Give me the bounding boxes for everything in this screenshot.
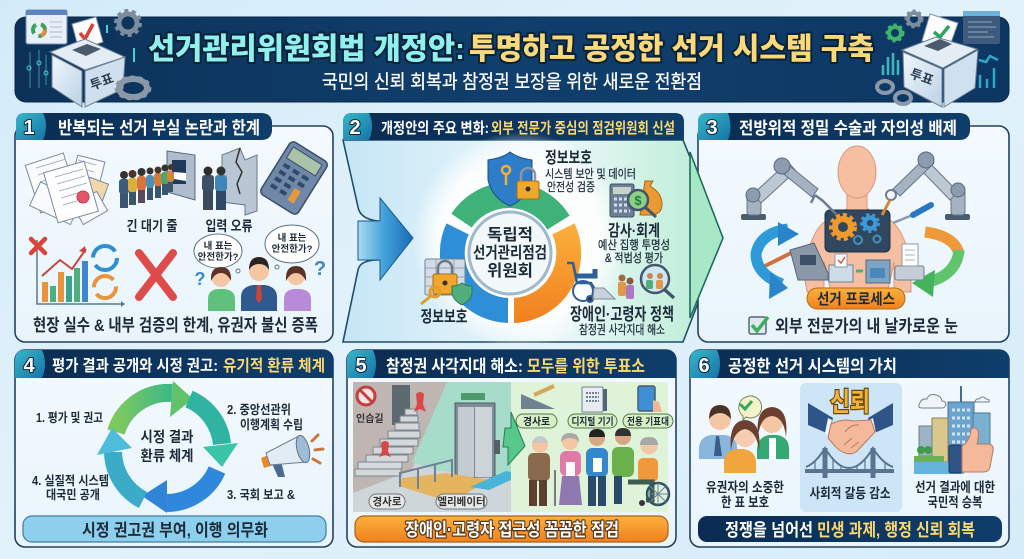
icon: handrail and ramp (399, 460, 511, 501)
panel 6: value of fair election system (690, 350, 1009, 547)
title: 투명하고 공정한 선거 시스템 구축 (469, 33, 874, 66)
panel 2 heading (343, 113, 684, 140)
label: stairs: 인습길 (356, 412, 384, 425)
panel 6 heading: 6 (698, 355, 710, 377)
label: disabled and senior policy: 참정권 사각지대 해소 (579, 323, 665, 337)
icon: suspension bridge (805, 448, 894, 478)
highlight bar: 시정 권고권 부여, 이행 의무화 (82, 521, 268, 540)
speech bubble right (265, 225, 319, 269)
icon: people under magnifier (618, 265, 674, 299)
panel 5 heading: 모두를 위한 투표소 (527, 357, 645, 376)
pill: dedicated booth: 전용 기표대 (627, 415, 669, 428)
cycle centre label (140, 429, 194, 465)
caption: 외부 전문가의 내 날카로운 눈 (775, 317, 958, 336)
icon: human torso (805, 146, 911, 292)
label: disabled and senior policy: 장애인·고령자 정책 (570, 305, 674, 324)
label: audit and accounting: & 적법성 평가 (605, 251, 663, 265)
arrow: blue left cycle (756, 222, 799, 299)
ring centre label: 위원회 (487, 262, 533, 280)
highlight bar: 정쟁을 넘어선 (725, 520, 813, 540)
label: step 4: 4. 실질적 시스템 (32, 474, 109, 488)
group of voters (528, 428, 669, 506)
chart: feedback cycle (97, 381, 238, 513)
panel 4 heading: 평가 결과 공개와 시정 권고: (52, 357, 218, 375)
label: elevator: 엘리베이터 (437, 495, 486, 508)
icon: check box (749, 317, 768, 334)
arrow: orange to green right cycle (912, 232, 959, 297)
label: audit and accounting: 예산 집행 투명성 (598, 237, 670, 252)
highlight bar (698, 516, 1002, 542)
panel 2 heading: 외부 전문가 중심의 점검위원회 신설 (491, 120, 675, 137)
icon: three voters and check (699, 396, 789, 473)
label: reduced social conflict: 사회적 갈등 감소 (810, 486, 890, 501)
trust word: 신뢰 (830, 387, 870, 417)
panel 5 heading (347, 350, 676, 378)
icon: left robot arm (741, 158, 836, 220)
green chevron tip of panel 2 (690, 152, 723, 318)
ring centre label: 선거관리점검 (473, 244, 547, 262)
marks: ribbons (379, 392, 426, 457)
icon: audit calculator and money: $ (634, 193, 642, 208)
icon: control panel with gears (825, 210, 890, 252)
panel 6 heading: 공정한 선거 시스템의 가치 (728, 357, 897, 376)
icon: digital device (582, 387, 607, 412)
icon: large red x (139, 253, 173, 297)
panel 4 heading: 유기적 환류 체계 (223, 357, 325, 375)
speech bubble right: 내 표는 (278, 232, 307, 244)
icon: left ballot box: 투표 (88, 71, 116, 93)
label: public acceptance (915, 480, 995, 510)
panel 5: eliminating voting blind spots (347, 350, 676, 547)
panel 3 heading: 전방위적 정밀 수술과 자의성 배제 (739, 119, 957, 138)
header banner (15, 10, 1009, 107)
speech bubble left: 내 표는 (204, 240, 233, 252)
pill: ramp: 경사로 (523, 415, 550, 428)
label: audit and accounting (598, 222, 670, 265)
arrow: cyan step (97, 428, 143, 500)
icon: long queue (119, 151, 195, 208)
icon: shield and lock (488, 152, 539, 206)
speech bubble right: 안전한가? (272, 243, 313, 255)
icon: elevator (455, 393, 500, 477)
icon: tablet (638, 386, 662, 412)
icon: megaphone (261, 434, 323, 477)
label: information protection top: 정보보호 (545, 149, 592, 167)
label: step 2: 이행계획 수립 (240, 417, 303, 432)
icon: right ballot box (877, 11, 1000, 107)
label: protecting each vote: 한 표 보호 (721, 495, 769, 510)
label: input error: 입력 오류 (206, 218, 253, 234)
speech bubble left: 안전한가? (198, 251, 239, 263)
label: information protection left: 정보보호 (420, 308, 468, 326)
arrow: blue step (142, 470, 217, 513)
panel 1 heading: 반복되는 선거 부실 논란과 한계 (58, 118, 260, 138)
title (148, 33, 874, 66)
panel 1 heading: 1 (23, 117, 35, 139)
panel 2 heading: 2 (349, 117, 361, 139)
illustration: stairs and elevator (353, 382, 511, 512)
icon: orange screwdriver (765, 251, 795, 266)
panel 3 heading: 3 (706, 117, 718, 139)
panel 3: precision surgery (690, 113, 1009, 342)
panel 2 heading: 개정안의 주요 변화: (381, 120, 489, 137)
icon: server lock and key (421, 259, 472, 305)
panel 4 heading: 4 (23, 355, 35, 377)
ring centre label: 독립적 (487, 226, 533, 244)
cycle centre label: 환류 체계 (140, 448, 194, 465)
label: audit and accounting: 감사·회계 (608, 222, 660, 240)
icon: city and thumbs up (914, 386, 993, 474)
label: protecting each vote: 유권자의 소중한 (706, 480, 784, 495)
label: disabled and senior policy (570, 305, 674, 337)
label: public acceptance: 국민적 승복 (928, 495, 982, 510)
label: step 2: 2. 중앙선관위 (227, 403, 291, 417)
label: step 4: 대국민 공개 (46, 488, 100, 502)
icon: voting machines (790, 243, 924, 283)
arrow: teal step (189, 399, 238, 467)
panel 5 heading: 참정권 사각지대 해소: (386, 357, 523, 376)
chart: committee ring (439, 181, 582, 324)
chart: mixed performance bars (37, 240, 125, 307)
panel 5 heading: 5 (355, 355, 367, 377)
cycle centre label: 시정 결과 (140, 429, 194, 446)
arrow: into panel 2 (358, 198, 413, 280)
highlight panel: trust (800, 383, 902, 512)
icon: circular arrows (93, 246, 117, 298)
pill: ramp (516, 414, 557, 428)
label: step 4 (32, 474, 109, 502)
pill: digital device (568, 414, 617, 428)
icon: audit calculator and money (610, 181, 662, 217)
highlight bar (23, 516, 326, 542)
icon: right ballot box: 투표 (908, 66, 936, 88)
icon: right robot arm (882, 152, 970, 220)
label: information protection top (545, 149, 636, 194)
panel 2: key changes in the amendment (343, 113, 723, 348)
icon: ramp (521, 394, 555, 409)
icon: blue screwdriver (893, 205, 931, 223)
caption: 현장 실수 & 내부 검증의 한계, 유권자 불신 증폭 (33, 316, 318, 335)
arrow: green step (116, 381, 193, 432)
icon: wheelchair and ramp (567, 263, 615, 302)
ring centre label (473, 226, 547, 280)
label: public acceptance: 선거 결과에 대한 (915, 480, 995, 495)
panel 6 heading (690, 350, 1009, 378)
label: information protection top: 안전성 검증 (547, 180, 595, 194)
label: ramp left (369, 494, 405, 509)
label: step 2 (227, 403, 303, 432)
illustration: accessible polling place (511, 382, 673, 512)
glow behind ring (412, 132, 628, 348)
highlight bar (355, 516, 668, 542)
icon: three worried voters: ? (194, 269, 206, 289)
panel 4 heading (15, 350, 333, 378)
panel 1: election failures (15, 113, 333, 342)
icon: no-entry sign (357, 387, 375, 405)
icon: three worried voters: ? (314, 258, 326, 280)
icon: handshake (808, 403, 893, 454)
label: step 3: 3. 국회 보고 & (227, 488, 295, 502)
panel 3 heading (698, 113, 970, 140)
icon: three worried voters (194, 257, 326, 311)
speech bubble left (194, 234, 242, 273)
pill: digital device: 디지털 기기 (572, 415, 614, 428)
label: information protection top: 시스템 보안 및 데이터 (545, 167, 636, 181)
label: step 1: 1. 평가 및 권고 (36, 410, 103, 425)
label: long queue: 긴 대기 줄 (126, 218, 178, 234)
icon: small red x (31, 239, 45, 253)
pill: election process: 선거 프로세스 (817, 291, 895, 308)
panel 4: publication and correction (15, 350, 333, 547)
icon: cracked wall and staff (202, 148, 257, 215)
label: ramp left: 경사로 (373, 495, 402, 508)
arrow: before to after (503, 412, 525, 465)
highlight bar: 민생 과제, 행정 신뢰 회복 (817, 520, 975, 540)
panel 1 heading (16, 113, 272, 140)
label: protecting each vote (706, 480, 784, 510)
icon: calculator (259, 140, 329, 216)
icon: stairs (355, 409, 420, 476)
pill: dedicated booth (623, 414, 673, 428)
icon: pile of documents (25, 153, 109, 225)
title: 선거관리위원회법 개정안: (148, 33, 465, 66)
subtitle: 국민의 신뢰 회복과 참정권 보장을 위한 새로운 전환점 (322, 71, 702, 93)
icon: left ballot box (26, 10, 150, 107)
highlight bar: 장애인·고령자 접근성 꼼꼼한 점검 (405, 520, 619, 540)
